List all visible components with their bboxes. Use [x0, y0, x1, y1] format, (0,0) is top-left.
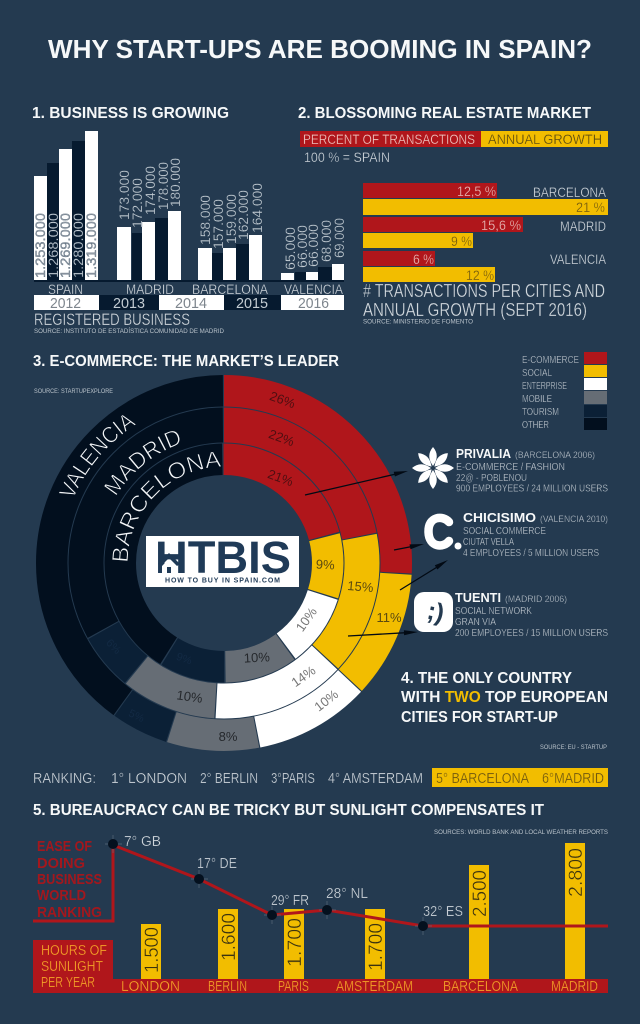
ranking row: RANKING: [33, 770, 96, 787]
bar chart: registered business: 174.000 [142, 166, 158, 215]
city labels: SPAIN [48, 281, 83, 297]
line chart: ease of doing business ranking: 17° DE [197, 855, 237, 872]
ring: Barcelona [120, 459, 328, 667]
bar chart: hours of sunlight: 1.600 [219, 913, 240, 961]
source: section 2: SOURCE: MINISTERIO DE FOMENTO [363, 320, 473, 326]
percent labels [103, 388, 402, 744]
label: ease of doing business: BUSINESS [37, 871, 102, 888]
year legend: 2015 [236, 295, 268, 312]
text: Privalia: PRIVALIA [456, 446, 512, 461]
bar chart: hours of sunlight: MADRID [551, 978, 598, 995]
caption: transactions [363, 281, 605, 320]
source: section 3: SOURCE: STARTUPEXPLORE [34, 389, 113, 395]
bar chart: transactions by city: 12,5 % [457, 183, 496, 199]
bar chart: registered business: 1.269.000 [57, 213, 73, 278]
heading: section 1: 1. BUSINESS IS GROWING [32, 105, 229, 122]
bar chart: registered business: 1.280.000 [70, 213, 86, 278]
donut chart: sectors by city [52, 391, 396, 735]
legend: sectors: SOCIAL [522, 368, 552, 379]
text: Chicisimo: CHICISIMO [463, 510, 536, 525]
ring: Valencia [52, 391, 396, 735]
ring: Madrid [86, 425, 362, 701]
caption: transactions: ANNUAL GROWTH (SEPT 2016) [363, 300, 587, 320]
text: Privalia: 22@ - POBLENOU [456, 472, 527, 484]
heading: section 4: WITH TWO TOP EUROPEAN [401, 689, 608, 706]
ranking row: 5° BARCELONA [436, 770, 529, 787]
bar chart: transactions by city: BARCELONA [533, 184, 607, 200]
year legend: 2013 [113, 295, 145, 312]
percent labels: 10% [243, 649, 271, 666]
bar chart: registered business: 173.000 [116, 170, 132, 220]
city labels: BARCELONA [192, 281, 269, 297]
label: ease of doing business: RANKING [37, 904, 102, 921]
line chart: ease of doing business ranking [33, 833, 608, 935]
bar chart: transactions by city: 6 % [413, 251, 434, 267]
bar chart: registered business: 1.268.000 [45, 213, 61, 278]
percent labels: 9% [315, 557, 335, 573]
percent labels: 5% [127, 707, 146, 725]
bar chart: transactions by city [363, 183, 608, 283]
logo: HTBIS: HTBIS [155, 532, 291, 583]
icon: Tuenti smile: ;) [425, 597, 447, 628]
ranking row: 6°MADRID [542, 770, 604, 787]
bar chart: registered business: 1.253.000 [32, 213, 48, 278]
legend: sectors [522, 352, 607, 431]
year legend: 2014 [175, 295, 207, 312]
panel: e-commerce [33, 353, 412, 751]
bar chart: hours of sunlight: 1.700 [366, 923, 387, 971]
bar chart: registered business: 66.000 [305, 224, 321, 267]
percent labels: 26% [268, 388, 298, 411]
heading: section 4: 4. THE ONLY COUNTRY [401, 670, 573, 687]
bar chart: registered business: 180.000 [167, 158, 183, 207]
bar chart: hours of sunlight [33, 843, 608, 995]
bar chart: hours of sunlight: 1.700 [285, 918, 306, 967]
icon: Chicisimo C [428, 518, 462, 550]
text: Privalia: (BARCELONA 2006) [515, 450, 595, 461]
city labels: MADRID [126, 281, 174, 297]
arrow: to Chicisimo text [400, 560, 448, 590]
panel: business is growing [32, 105, 347, 335]
company: Chicisimo [428, 510, 608, 559]
percent labels: 15% [347, 578, 374, 595]
text: Chicisimo [463, 510, 608, 559]
caption: registered business: REGISTERED BUSINESS [34, 310, 190, 329]
bar chart: transactions by city: VALENCIA [550, 251, 607, 267]
text: Chicisimo: 4 EMPLOYEES / 5 MILLION USERS [463, 547, 599, 559]
legend: transactions and growth: 100 % = SPAIN [304, 149, 390, 165]
city labels on rings: MADRID [104, 431, 180, 495]
label: ease of doing business [37, 838, 102, 921]
bar chart: transactions by city: 12 % [466, 267, 494, 283]
bar chart: hours of sunlight: LONDON [121, 978, 180, 995]
bar chart: transactions by city: 21 % [576, 199, 605, 215]
text: Tuenti: TUENTI [455, 590, 501, 605]
text: Chicisimo: (VALENCIA 2010) [540, 514, 608, 525]
bar chart: transactions by city: MADRID [560, 218, 606, 234]
percent labels: 11% [376, 610, 402, 625]
text: Privalia: E-COMMERCE / FASHION [456, 461, 565, 473]
bar chart: hours of sunlight: 2.800 [566, 848, 587, 897]
company: Tuenti [414, 590, 608, 639]
line chart: ease of doing business ranking: 32° ES [423, 903, 463, 920]
bar chart: registered business: 164.000 [249, 183, 265, 233]
bar chart: hours of sunlight: 1.500 [142, 927, 163, 973]
percent labels: 10% [293, 604, 320, 634]
bar chart: registered business: 68.000 [318, 220, 334, 262]
bar chart: transactions by city: 9 % [451, 233, 472, 249]
year legend: 2016 [298, 295, 329, 312]
heading: section 5: 5. BUREAUCRACY CAN BE TRICKY BUT SUNLIGHT COMPENSATES IT [33, 802, 545, 819]
bar chart: hours of sunlight: HOURS OF [41, 942, 107, 959]
text: Tuenti: (MADRID 2006) [505, 594, 567, 605]
text: Chicisimo: CIUTAT VELLA [463, 536, 514, 548]
arrow: to Tuenti [348, 630, 418, 636]
bar chart: registered business: 172.000 [129, 178, 145, 228]
city labels [48, 281, 344, 297]
percent labels: 10% [176, 687, 204, 706]
bar chart: hours of sunlight: PER YEAR [41, 974, 95, 991]
icon: Privalia flower [412, 447, 454, 489]
year legend [34, 295, 344, 312]
heading: section 4 [401, 670, 608, 726]
legend: transactions and growth: PERCENT OF TRANSACTIONS [303, 131, 475, 147]
bar chart: hours of sunlight: 2.500 [470, 870, 491, 917]
ranking row [33, 768, 608, 787]
label: ease of doing business: EASE OF [37, 838, 92, 855]
city labels on rings: VALENCIA [59, 415, 136, 494]
bar chart: transactions by city: 15,6 % [481, 217, 521, 233]
legend: sectors: E-COMMERCE [522, 355, 579, 366]
logo: HTBIS: HOW TO BUY IN SPAIN.COM [165, 578, 280, 584]
bar chart: registered business: 1.319.000 [83, 213, 99, 278]
arrow: to Privalia [305, 471, 408, 495]
bar chart: hours of sunlight: PARIS [278, 978, 309, 995]
percent labels: 22% [267, 426, 297, 449]
text: Privalia: 900 EMPLOYEES / 24 MILLION USERS [456, 482, 608, 494]
text: Tuenti [455, 590, 608, 639]
source: section 5: SOURCES: WORLD BANK AND LOCAL WEATHER REPORTS [434, 830, 608, 836]
percent labels: 9% [175, 651, 194, 668]
heading: section 4: CITIES FOR START-UP [401, 709, 558, 726]
bar chart: hours of sunlight: BERLIN [208, 978, 247, 995]
label: ease of doing business: DOING [37, 855, 85, 872]
source: section 1: SOURCE: INSTITUTO DE ESTADÍSTICA COMUNIDAD DE MADRID [34, 328, 225, 335]
bar chart: registered business: 65.000 [282, 227, 298, 270]
title: WHY START-UPS ARE BOOMING IN SPAIN? [48, 34, 592, 64]
bar chart: hours of sunlight: BARCELONA [443, 978, 518, 995]
line chart: ease of doing business ranking: 28° NL [326, 885, 368, 902]
city labels: VALENCIA [284, 281, 344, 297]
legend: sectors: ENTERPRISE [522, 381, 567, 392]
arrow: to Chicisimo logo [394, 544, 424, 550]
legend: sectors: TOURISM [522, 407, 559, 418]
label: ease of doing business: WORLD [37, 887, 86, 904]
percent labels: 14% [288, 662, 319, 690]
bar chart: registered business: 178.000 [155, 162, 171, 210]
ranking row: 2° BERLIN [200, 770, 258, 787]
text: Tuenti: 200 EMPLOYEES / 15 MILLION USERS [455, 627, 608, 639]
bar chart: hours of sunlight: AMSTERDAM [336, 978, 413, 995]
bar chart: registered business: 157.000 [210, 199, 226, 249]
heading: section 2: 2. BLOSSOMING REAL ESTATE MARKET [298, 105, 592, 122]
percent labels: 8% [219, 729, 238, 744]
percent labels: 6% [103, 637, 123, 657]
year legend: 2012 [50, 295, 81, 312]
ranking row: 1° LONDON [111, 770, 187, 787]
ranking row: 4° AMSTERDAM [328, 770, 423, 787]
icon: Tuenti smile [414, 592, 453, 632]
bar chart: registered business: 159.000 [223, 194, 239, 244]
city labels on rings [59, 415, 221, 561]
bar chart: registered business: 162.000 [235, 190, 251, 240]
text: Tuenti: GRAN VIA [455, 616, 496, 628]
line chart: ease of doing business ranking: 7° GB [124, 833, 161, 850]
legend: transactions and growth [300, 131, 608, 165]
legend: transactions and growth: ANNUAL GROWTH [488, 131, 602, 147]
text: Tuenti: SOCIAL NETWORK [455, 605, 532, 617]
text: Privalia [456, 446, 608, 494]
panel: bureaucracy and sunlight [33, 802, 608, 995]
text: Chicisimo: SOCIAL COMMERCE [463, 525, 546, 537]
percent labels: 10% [311, 686, 341, 714]
legend: sectors: MOBILE [522, 394, 552, 405]
bar chart: registered business: 69.000 [331, 218, 347, 258]
line chart: ease of doing business ranking: 29° FR [271, 892, 309, 909]
percent labels: 21% [266, 466, 296, 489]
panel: real estate market [298, 105, 608, 326]
city labels on rings: BARCELONA [112, 452, 221, 561]
bar chart: registered business [32, 131, 347, 282]
ranking row: 3°PARIS [271, 770, 315, 787]
bar chart: registered business: 66.000 [294, 225, 310, 268]
legend: sectors: OTHER [522, 420, 549, 431]
bar chart: hours of sunlight: SUNLIGHT [41, 958, 103, 975]
company: Privalia [412, 446, 608, 494]
source: section 4: SOURCE: EU - STARTUP [540, 745, 607, 751]
bar chart: registered business: 158.000 [197, 195, 213, 245]
heading: section 3: 3. E-COMMERCE: THE MARKET’S LEADER [33, 353, 339, 370]
